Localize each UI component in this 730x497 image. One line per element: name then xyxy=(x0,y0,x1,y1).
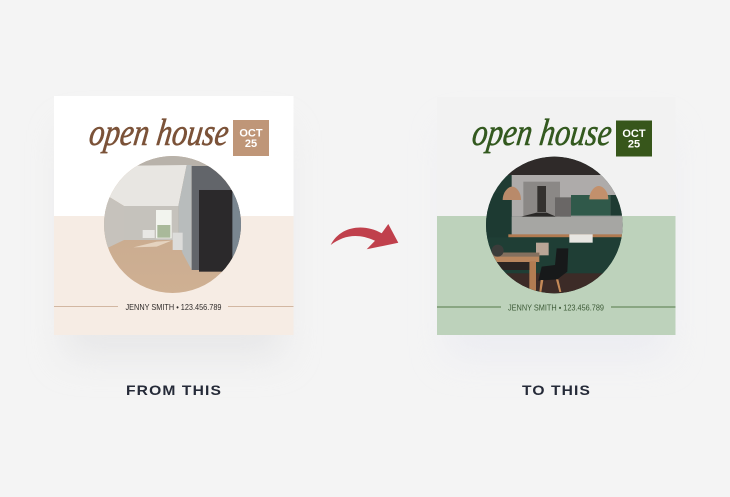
date badge: 25 xyxy=(628,138,640,150)
heading: open house: open house xyxy=(470,112,615,154)
panel: before flyer xyxy=(54,96,294,335)
date badge: OCT xyxy=(622,128,646,140)
arrow: before to after xyxy=(331,224,398,249)
date badge xyxy=(233,120,269,156)
label: from this: FROM THIS xyxy=(126,382,222,398)
heading: open house: open house xyxy=(87,112,232,154)
photo: green kitchen in circle xyxy=(485,155,625,295)
date badge: OCT xyxy=(239,128,263,140)
date badge xyxy=(616,120,652,156)
label: to this: TO THIS xyxy=(522,382,591,398)
panel: after flyer xyxy=(437,97,676,335)
date badge: 25 xyxy=(245,138,257,150)
contact line: JENNY SMITH • 123.456.789 xyxy=(126,302,222,312)
photo: empty room in circle xyxy=(103,155,243,295)
contact line: JENNY SMITH • 123.456.789 xyxy=(508,302,604,312)
